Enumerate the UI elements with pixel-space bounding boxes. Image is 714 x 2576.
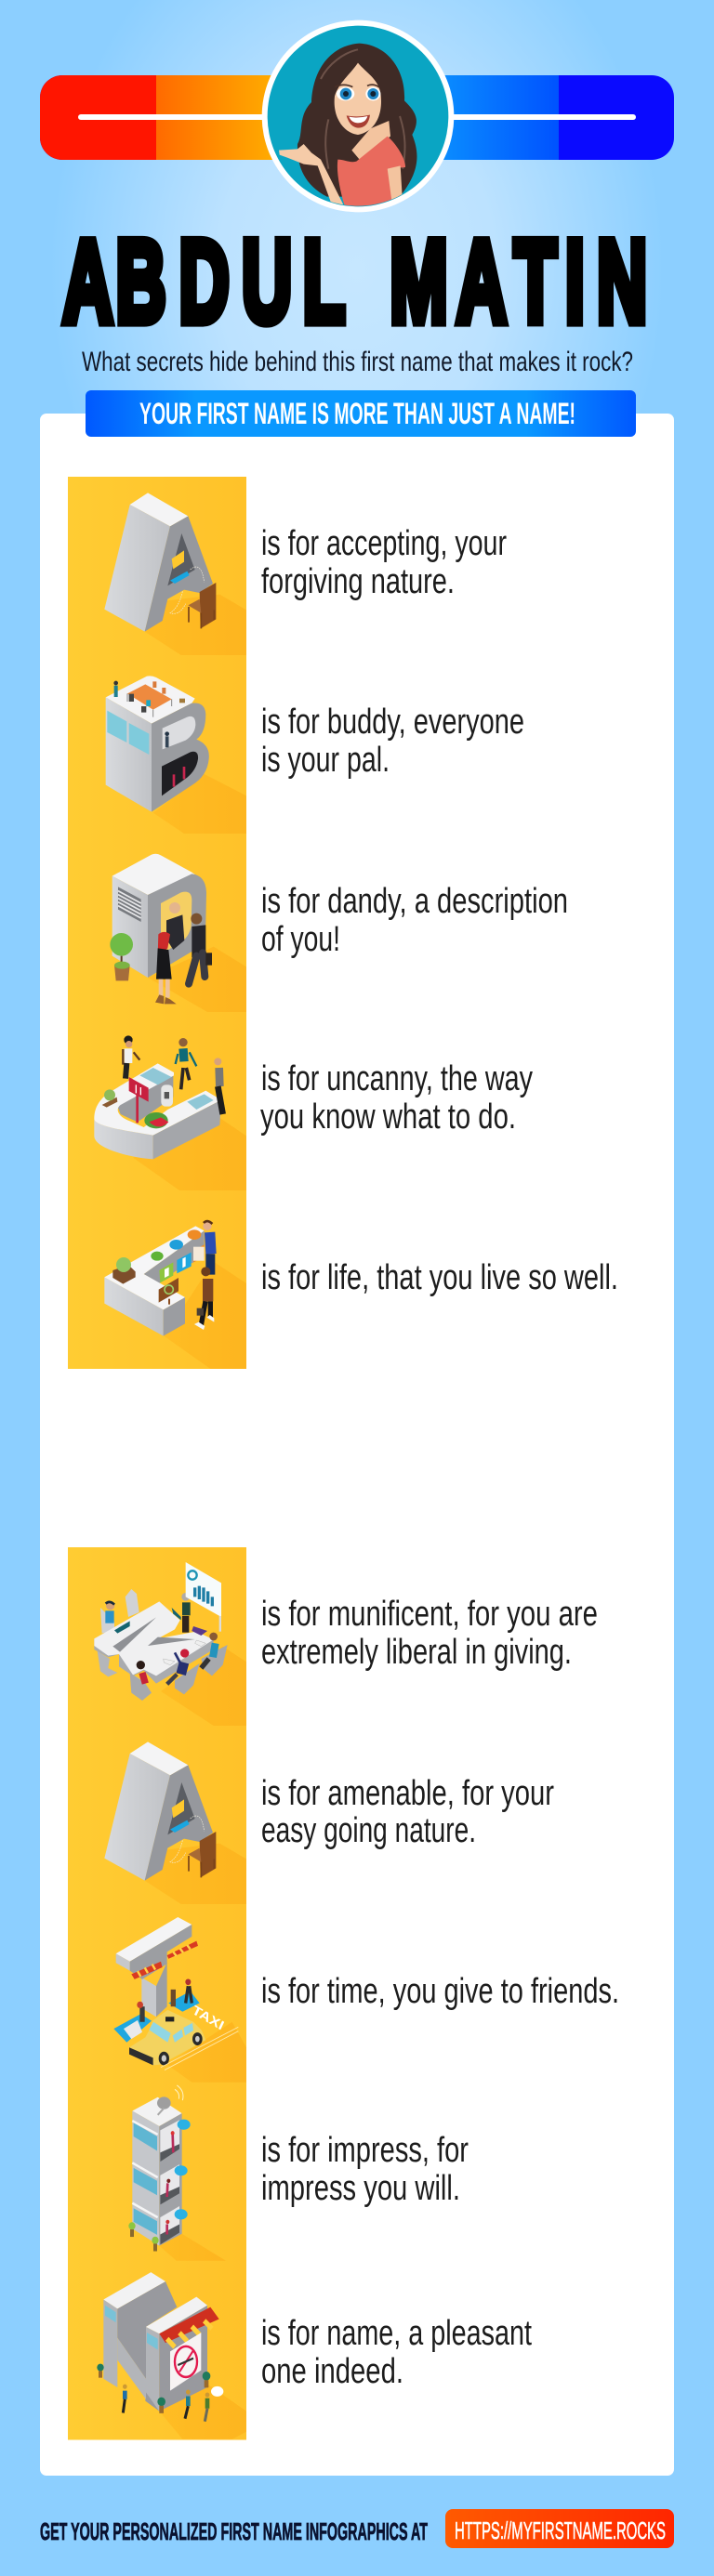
panel: letter L illustration [68, 1190, 246, 1369]
header gradient bar [40, 75, 674, 160]
text: I is for impress [261, 2131, 469, 2208]
text: A is for amenable [261, 1774, 554, 1850]
text: B is for buddy: is for buddy, everyone [261, 703, 524, 742]
panel: letter I illustration [68, 2083, 246, 2262]
text: N is for name: one indeed. [261, 2352, 403, 2391]
text: B is for buddy: is your pal. [261, 741, 390, 780]
text: N is for name: is for name, a pleasant [261, 2314, 532, 2353]
text: B is for buddy [261, 703, 524, 780]
title: ABDUL MATIN [63, 217, 647, 347]
text: A is for amenable: easy going nature. [261, 1811, 476, 1850]
panel: letter M illustration [68, 1547, 246, 1726]
panel: letter U illustration [68, 1012, 246, 1190]
banner [86, 390, 636, 437]
text: A is for accepting: forgiving nature. [261, 562, 455, 601]
panel: letter T illustration: TAXI [190, 2003, 226, 2033]
text: M is for munificent [261, 1595, 598, 1672]
text: D is for dandy: is for dandy, a description [261, 882, 568, 921]
text: D is for dandy [261, 882, 568, 959]
text: M is for munificent: extremely liberal in giving. [261, 1633, 572, 1672]
footer url button [445, 2509, 674, 2548]
text: A is for accepting [261, 524, 507, 601]
text: U is for uncanny: is for uncanny, the way [261, 1059, 533, 1098]
text: A is for amenable: is for amenable, for your [261, 1774, 554, 1813]
panel: letter N illustration [68, 2261, 246, 2440]
text: U is for uncanny: you know what to do. [260, 1097, 516, 1137]
panel: letter B illustration [68, 655, 246, 834]
panel: letter A illustration [68, 477, 246, 655]
text: U is for uncanny [260, 1059, 533, 1137]
panel: letter A illustration (second) [68, 1726, 246, 1904]
text: I is for impress: is for impress, for [261, 2131, 469, 2170]
text: A is for accepting: is for accepting, your [261, 524, 507, 563]
white content panel [40, 414, 674, 2476]
text: N is for name [261, 2314, 532, 2391]
text: D is for dandy: of you! [261, 920, 340, 959]
panel: letter D illustration [68, 834, 246, 1012]
portrait avatar [262, 20, 454, 212]
text: I is for impress: impress you will. [261, 2169, 460, 2208]
text: M is for munificent: is for munificent, for you are [261, 1595, 598, 1634]
panel: letter T illustration [68, 1904, 246, 2083]
